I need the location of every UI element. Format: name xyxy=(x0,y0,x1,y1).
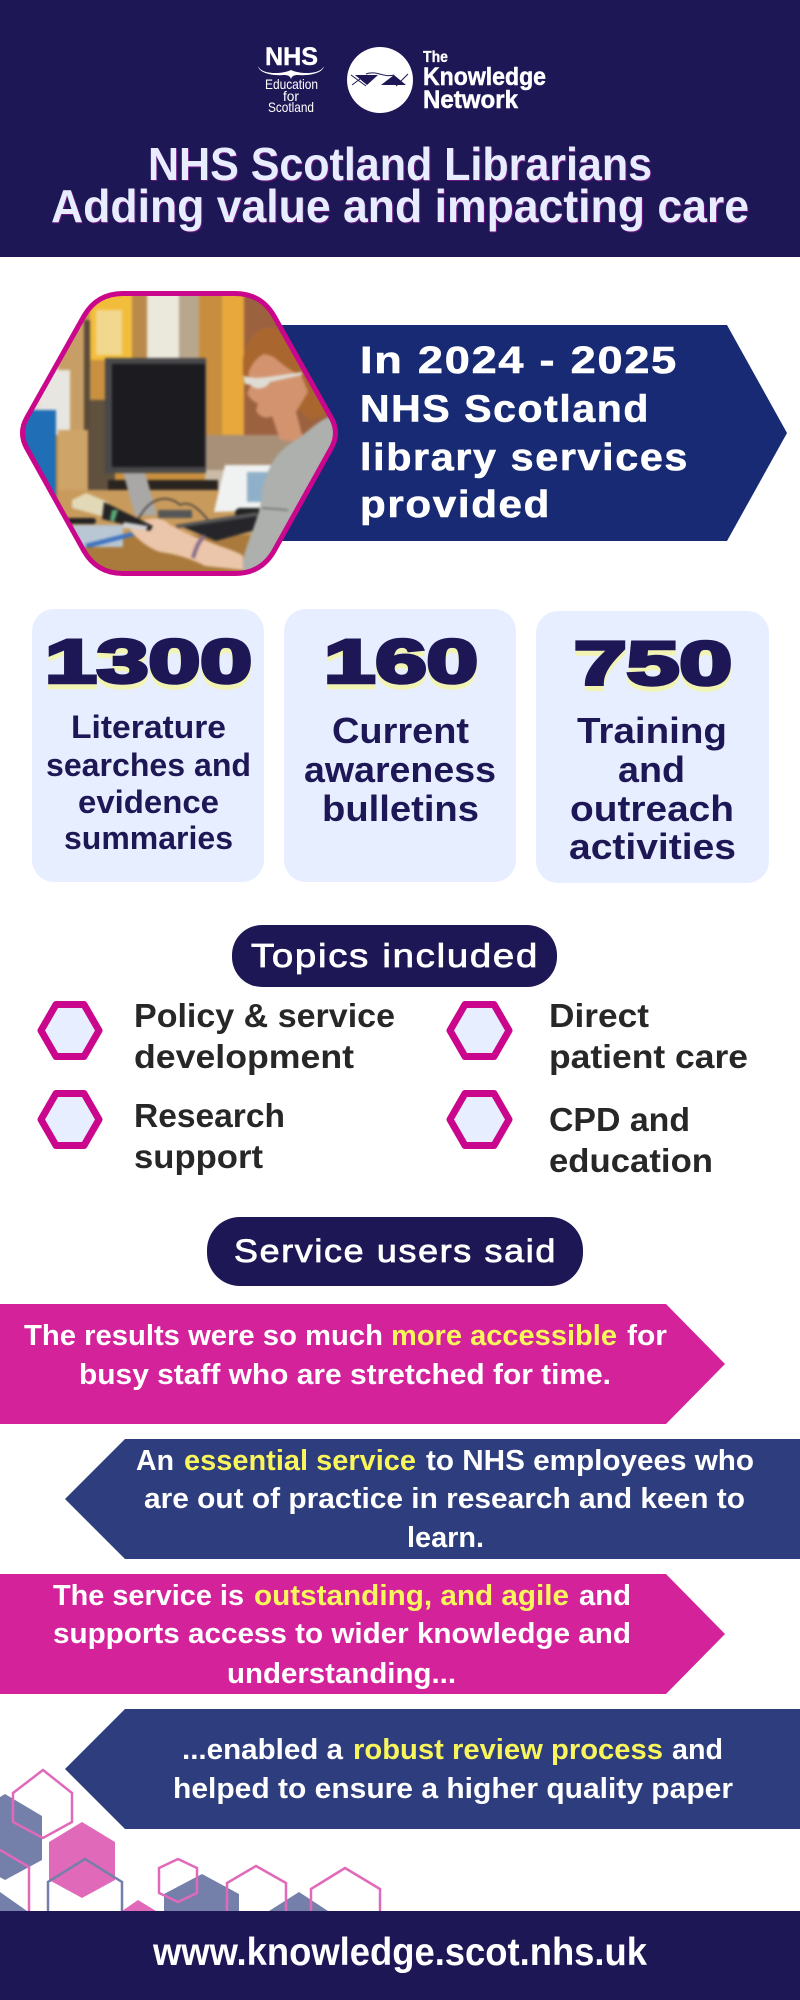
topic text: CPD and xyxy=(549,1101,690,1138)
number: 160: 160 xyxy=(324,628,478,696)
label: literature searches and evidence summaries: summaries xyxy=(64,820,233,856)
logo: The Knowledge Network xyxy=(347,47,546,114)
quote arrow 1: for xyxy=(627,1320,667,1352)
stat card: current awareness xyxy=(284,609,516,882)
banner arrow: 2024-2025 xyxy=(240,325,787,541)
title: NHS Scotland Librarians xyxy=(148,138,652,190)
heading pill: service users said xyxy=(207,1217,583,1286)
logo: NHS Education for Scotland: for xyxy=(283,88,299,104)
label: current awareness bulletins: awareness xyxy=(304,749,496,790)
quote arrow 2: An xyxy=(136,1445,174,1477)
logo: The Knowledge Network: The xyxy=(423,49,448,66)
quote arrow 3: understanding... xyxy=(227,1658,456,1690)
label: literature searches and evidence summaries: Literature xyxy=(71,709,226,745)
icon: hexagon xyxy=(450,1094,509,1146)
quote arrow 2: learn. xyxy=(407,1522,484,1554)
quote arrow 4: and xyxy=(672,1734,723,1766)
label: literature searches and evidence summaries: searches and xyxy=(46,747,251,783)
footer band with website address: www.knowledge.scot.nhs.uk xyxy=(152,1931,647,1974)
quote arrow 1: The results were so much xyxy=(24,1320,383,1352)
hair back xyxy=(243,327,330,420)
decorative hexagon cluster xyxy=(0,1768,382,1911)
topic text xyxy=(549,997,748,1075)
quote arrow 1: more accessible xyxy=(391,1320,617,1352)
label: literature searches and evidence summaries xyxy=(46,709,251,856)
quote arrow 4: robust review process xyxy=(353,1734,663,1766)
topic text: Research xyxy=(134,1097,285,1134)
label: current awareness bulletins: Current xyxy=(332,710,469,751)
topic text: Direct xyxy=(549,997,649,1034)
glasses xyxy=(243,372,302,388)
stat card: training and outreach xyxy=(536,611,769,883)
banner text xyxy=(360,340,689,526)
label: training and outreach activities: outreach xyxy=(570,788,734,829)
quote arrow 3: supports access to wider knowledge and xyxy=(53,1618,631,1650)
label: training and outreach activities: and xyxy=(618,749,685,790)
quote arrow 3: and xyxy=(579,1580,631,1612)
icon: hexagon xyxy=(450,1004,509,1056)
quote arrow 2 xyxy=(65,1439,800,1559)
topic text: development xyxy=(134,1038,354,1075)
label: current awareness bulletins xyxy=(304,710,496,829)
heading pill: topics included xyxy=(232,925,557,987)
face and neck xyxy=(247,353,308,442)
title xyxy=(51,138,749,232)
logo: NHS Education for Scotland xyxy=(258,43,324,115)
stat card: literature searches xyxy=(32,609,264,882)
banner text: NHS Scotland xyxy=(360,388,650,430)
quote arrow 1 xyxy=(0,1304,725,1424)
title: Adding value and impacting care xyxy=(51,180,749,232)
topic text xyxy=(134,1097,285,1175)
label: training and outreach activities: activities xyxy=(569,826,736,867)
topic text: support xyxy=(134,1138,263,1175)
banner text: library services xyxy=(360,437,689,479)
logo: NHS Education for Scotland: Education xyxy=(265,76,318,92)
photo: librarian at a computer in hexagon frame xyxy=(10,285,348,580)
header band xyxy=(0,0,800,257)
quote arrow 3: The service is xyxy=(53,1580,244,1612)
number: 1300: 1300 xyxy=(45,628,252,696)
topic text xyxy=(549,1101,713,1179)
quote arrow 3: outstanding, and agile xyxy=(254,1580,569,1612)
label: training and outreach activities: Training xyxy=(577,710,727,751)
label: training and outreach activities xyxy=(569,710,736,867)
topic: direct patient care xyxy=(450,997,748,1075)
icon: hexagon xyxy=(41,1094,99,1146)
quote arrow 2: to NHS employees who xyxy=(426,1445,754,1477)
logo: The Knowledge Network: Network xyxy=(423,86,518,114)
topic: CPD and education xyxy=(450,1094,713,1179)
quote arrow 2: are out of practice in research and keen to xyxy=(144,1483,745,1515)
banner text: In 2024 - 2025 xyxy=(360,340,678,382)
label: literature searches and evidence summaries: evidence xyxy=(78,784,219,820)
quote arrow 3 xyxy=(0,1574,725,1694)
quote arrow 4: helped to ensure a higher quality paper xyxy=(173,1773,733,1805)
topic text xyxy=(134,997,395,1075)
topic text: education xyxy=(549,1142,713,1179)
topic text: Policy & service xyxy=(134,997,395,1034)
icon: hexagon xyxy=(41,1004,99,1056)
label: current awareness bulletins: bulletins xyxy=(322,788,479,829)
quote arrow 4: ...enabled a xyxy=(182,1734,344,1766)
logo: NHS Education for Scotland: Scotland xyxy=(268,99,314,115)
quote arrow 1: busy staff who are stretched for time. xyxy=(79,1359,611,1391)
topic text: patient care xyxy=(549,1038,748,1075)
heading pill: service users said: Service users said xyxy=(234,1233,557,1269)
logo: NHS Education for Scotland: NHS xyxy=(265,43,318,71)
fringe xyxy=(246,352,300,374)
footer band with website address xyxy=(0,1911,800,2000)
topic: policy and service development xyxy=(41,997,395,1075)
number: 750: 750 xyxy=(574,630,732,698)
logo: The Knowledge Network: Knowledge xyxy=(423,63,546,91)
heading pill: topics included: Topics included xyxy=(251,937,539,974)
sweater xyxy=(243,416,338,576)
banner text: provided xyxy=(360,484,551,526)
quote arrow 4 xyxy=(65,1709,800,1829)
quote arrow 2: essential service xyxy=(184,1445,416,1477)
topic: research support xyxy=(41,1094,285,1175)
